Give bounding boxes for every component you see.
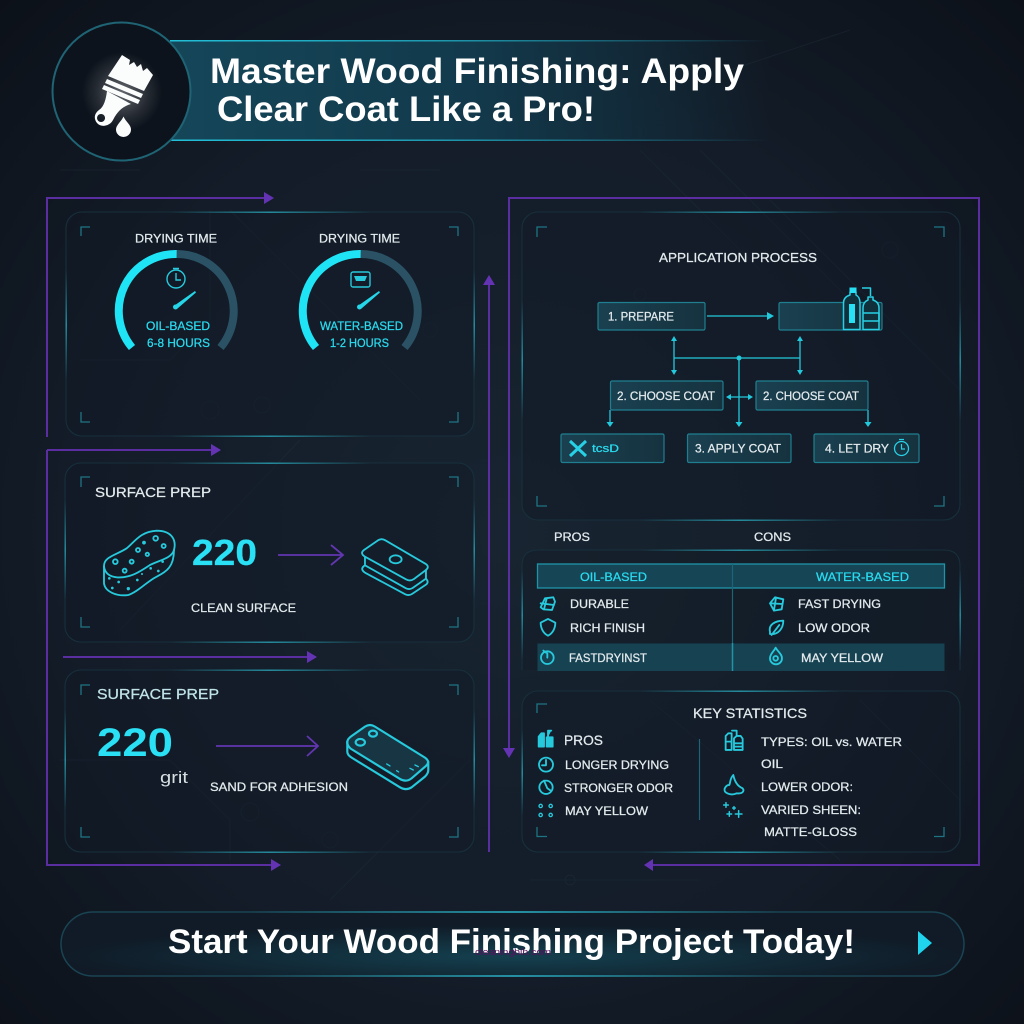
panel: surface prep clean: SURFACE PREP — [95, 484, 211, 500]
table text — [569, 597, 884, 665]
call to action: Start Your Wood Finishing Project Today! — [168, 923, 855, 961]
text: left column: LONGER DRYING — [565, 758, 669, 772]
table text: MAY YELLOW — [801, 651, 884, 665]
arrow — [278, 545, 343, 565]
gauge: oil-based: 6-8 HOURS — [147, 336, 210, 350]
table text: DURABLE — [570, 597, 629, 611]
text: right column: OIL — [761, 757, 783, 771]
call to action — [61, 911, 964, 977]
gauge: oil-based: DRYING TIME — [135, 232, 217, 246]
icon: play arrow — [918, 931, 932, 955]
panel: application process — [522, 212, 961, 521]
table header — [538, 564, 944, 588]
pros and cons labels: CONS — [754, 530, 791, 544]
text: right column: LOWER ODOR: — [761, 780, 853, 794]
text: right column: MATTE-GLOSS — [764, 825, 857, 839]
icon: sanding block — [362, 539, 428, 595]
header banner — [170, 40, 770, 141]
text: left column: PROS — [564, 732, 603, 748]
stat: 220 grit: grit — [160, 768, 188, 787]
step: apply coat — [688, 434, 791, 462]
table text: FAST DRYING — [798, 597, 881, 611]
icon: sanding pad — [347, 725, 428, 789]
panel: surface prep clean — [64, 462, 475, 643]
step: apply coat: 3. APPLY COAT — [695, 442, 782, 456]
pros and cons labels: PROS — [554, 530, 590, 544]
step: choose coat right: 2. CHOOSE COAT — [763, 389, 860, 403]
panel: surface prep sand — [64, 670, 475, 853]
text: right column — [761, 735, 902, 839]
table icons — [541, 597, 783, 664]
icons: right column — [724, 731, 743, 817]
gauge: water-based — [303, 232, 418, 350]
step: tools — [561, 434, 664, 462]
pros and cons labels — [554, 530, 791, 544]
step: tools: tcsD — [592, 443, 619, 455]
table header: WATER-BASED — [816, 570, 909, 584]
panel: application process: APPLICATION PROCESS — [659, 251, 817, 265]
table text: FASTDRYINST — [569, 651, 648, 665]
panel: surface prep sand: SURFACE PREP — [97, 687, 219, 703]
title — [210, 52, 745, 129]
gauge: water-based: 1-2 HOURS — [330, 336, 389, 350]
step: blank with bottles — [779, 288, 882, 330]
flow arrow frames — [47, 192, 979, 871]
text: left column: MAY YELLOW — [565, 804, 649, 818]
gauge: water-based: WATER-BASED — [320, 319, 403, 333]
arrow — [216, 736, 318, 756]
icon: paint brush badge — [52, 22, 190, 160]
step: let dry — [814, 434, 919, 462]
gauge: water-based: DRYING TIME — [319, 232, 400, 246]
panel: key statistics: KEY STATISTICS — [693, 705, 807, 721]
title: Clear Coat Like a Pro! — [217, 90, 595, 129]
step: let dry: 4. LET DRY — [825, 442, 889, 456]
table text: RICH FINISH — [570, 621, 645, 635]
title: Master Wood Finishing: Apply — [210, 52, 745, 91]
step: prepare: 1. PREPARE — [608, 310, 674, 324]
text: left column: STRONGER ODOR — [564, 781, 673, 795]
panel: drying time — [66, 212, 475, 437]
step: choose coat left: 2. CHOOSE COAT — [617, 389, 716, 403]
text: right column: TYPES: OIL vs. WATER — [761, 735, 902, 749]
stat: 220 grit: 220 — [97, 721, 173, 765]
panel: surface prep sand: SAND FOR ADHESION — [210, 780, 348, 794]
watermark: cleaningbib.com — [475, 947, 551, 957]
step: choose coat left — [610, 381, 723, 410]
stat: 220: 220 — [192, 532, 257, 573]
step: prepare — [598, 302, 705, 330]
step: choose coat right — [756, 381, 868, 410]
icons: left column — [539, 731, 553, 817]
panel: key statistics — [522, 690, 960, 853]
gauge: oil-based — [119, 232, 234, 350]
table text: LOW ODOR — [798, 621, 870, 635]
text: left column — [564, 732, 673, 818]
panel: surface prep clean: CLEAN SURFACE — [191, 601, 296, 615]
panel: comparison table — [522, 550, 961, 671]
gauge: oil-based: OIL-BASED — [146, 319, 210, 333]
highlighted row — [538, 644, 944, 671]
stat: 220 grit — [97, 721, 188, 787]
icon: sponge — [104, 531, 175, 595]
text: right column: VARIED SHEEN: — [761, 803, 861, 817]
flowchart connectors — [606, 312, 872, 427]
table header: OIL-BASED — [580, 570, 647, 584]
